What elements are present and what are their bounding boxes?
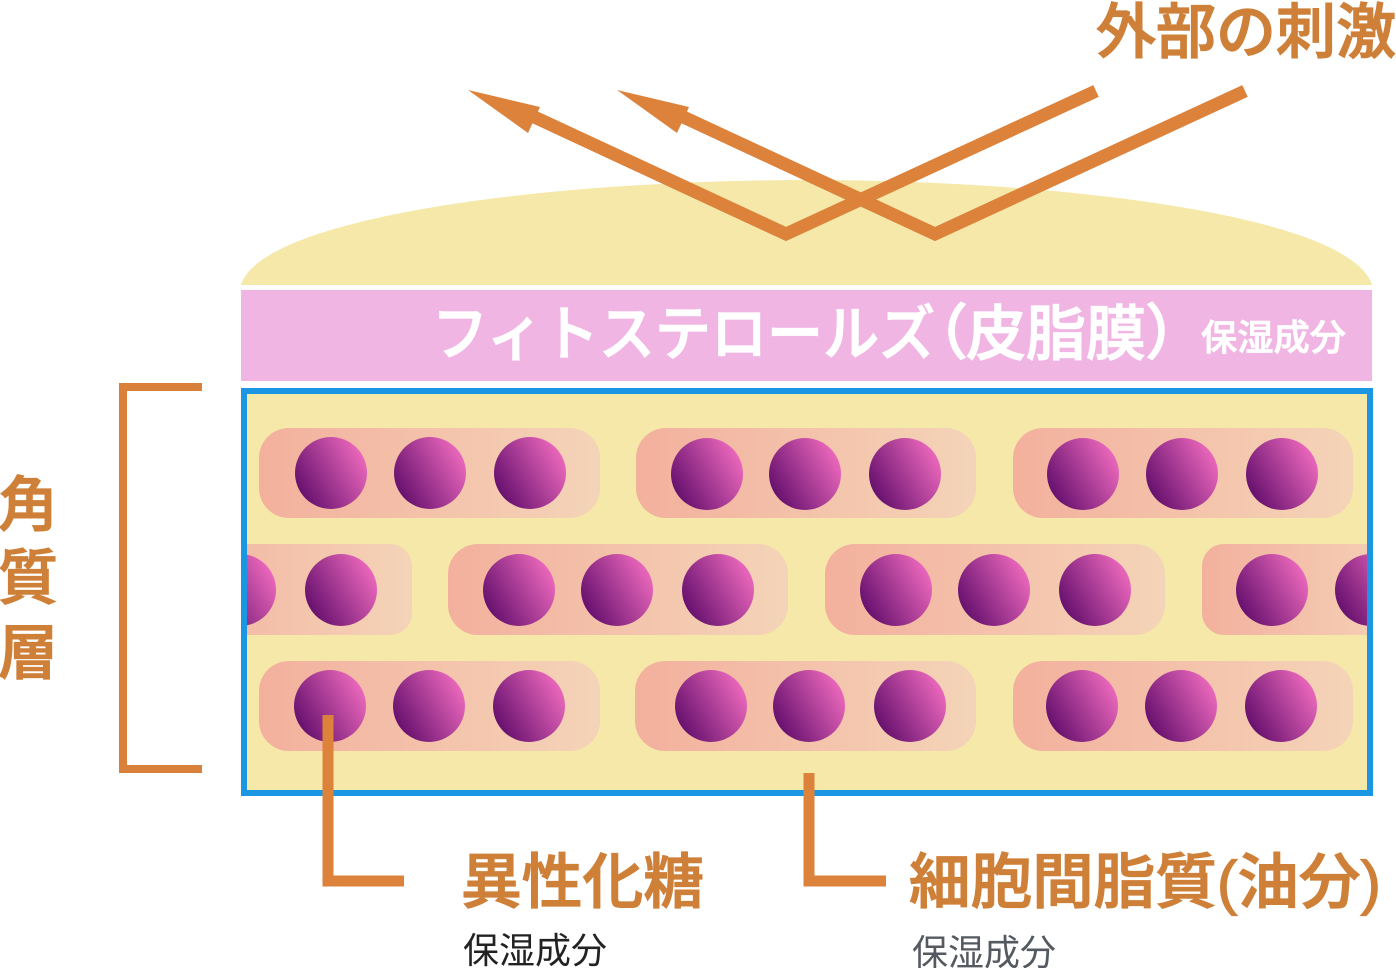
heading: phytosterols: ） xyxy=(1145,300,1205,367)
heading: isomerized sugar: 異性化糖 xyxy=(461,849,704,916)
heading: phytosterols xyxy=(432,300,1205,368)
arrow: reflected stimulus right xyxy=(617,90,1245,234)
leader: intercellular lipid xyxy=(809,773,886,881)
heading: phytosterols: 皮脂膜 xyxy=(966,301,1146,368)
heading: phytosterols: フィトステロールズ xyxy=(432,301,935,368)
arrow: reflected stimulus left xyxy=(468,90,1096,234)
text: moisturizing on band: 保湿成分 xyxy=(1201,317,1346,358)
heading: external stimulus: 外部の刺激 xyxy=(1096,0,1396,66)
sebum dome xyxy=(241,180,1372,285)
heading: phytosterols: （ xyxy=(908,300,968,367)
bracket: stratum corneum xyxy=(123,387,202,769)
panel: stratum corneum xyxy=(160,391,1396,793)
row 2 cells xyxy=(160,544,1396,635)
leader: isomerized sugar xyxy=(328,715,404,881)
row 1 cells xyxy=(259,428,1353,518)
label: stratum corneum xyxy=(0,472,58,687)
panel: phytosterols sebum band xyxy=(241,290,1372,381)
row 3 cells xyxy=(259,661,1353,751)
heading: intercellular lipid: 細胞間脂質(油分) xyxy=(909,849,1381,916)
